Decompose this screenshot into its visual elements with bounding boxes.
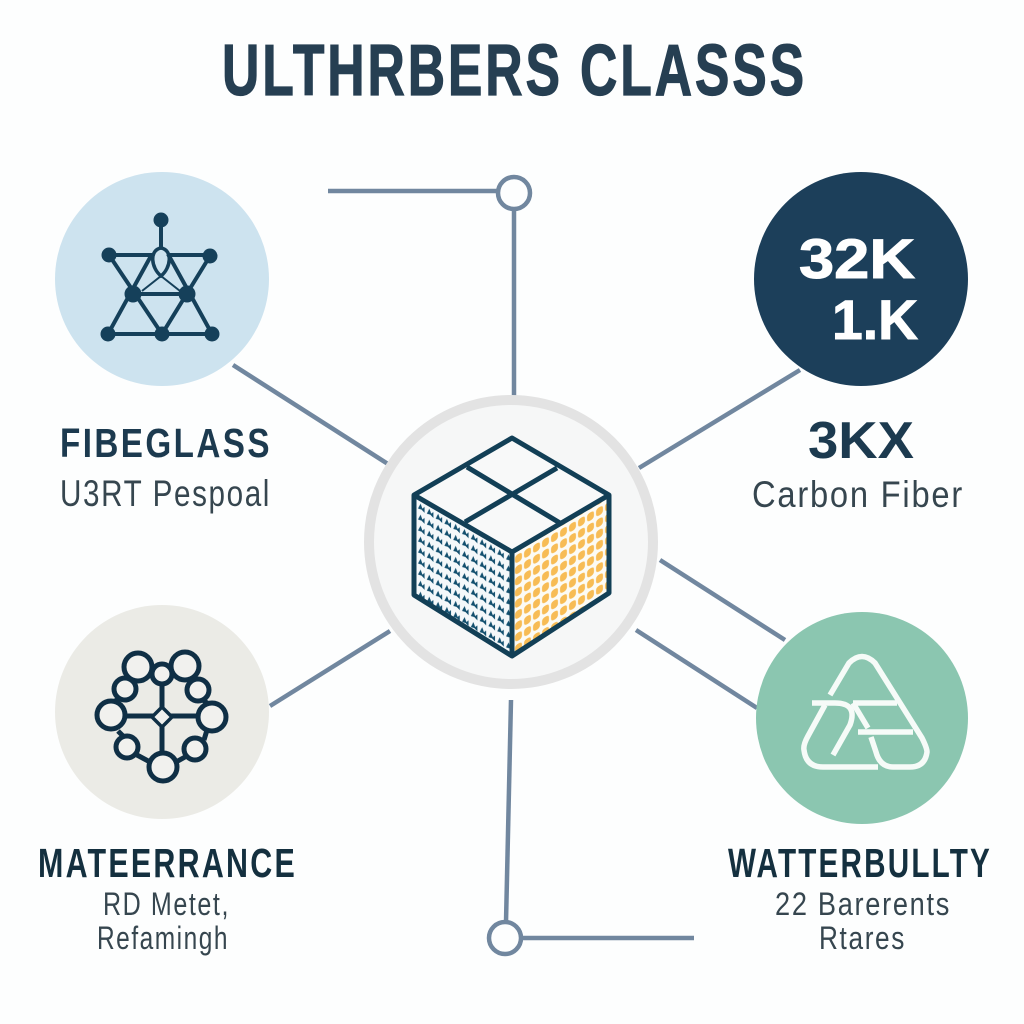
icon: lattice network	[100, 212, 220, 342]
label: carbon fiber: 3KX	[808, 412, 914, 470]
connector lines	[233, 191, 800, 938]
panel: maintenance circle	[55, 605, 269, 819]
sublabel: U3RT Pespoal	[60, 473, 271, 514]
icon: recycling triangle	[804, 656, 927, 767]
stat: 32K: 32K	[799, 227, 915, 290]
label: waterbullty	[728, 840, 992, 956]
sublabel line 2: Refamingh	[97, 920, 229, 956]
sublabel: Carbon Fiber	[752, 474, 964, 515]
label: carbon fiber	[752, 412, 964, 515]
sublabel line 2: Rtares	[819, 920, 906, 956]
label: maintenance	[38, 840, 297, 956]
sublabel line 1: RD Metet,	[103, 886, 230, 922]
bottom connector node	[489, 922, 521, 954]
icon: node ring	[97, 652, 226, 781]
label: fiberglass	[60, 420, 272, 514]
panel: carbon fiber circle	[754, 172, 968, 386]
icon: composite cube	[414, 438, 609, 656]
top connector node	[498, 177, 530, 209]
panel: waterbullty circle	[756, 612, 968, 824]
panel: fiberglass circle	[55, 172, 269, 386]
sublabel line 1: 22 Barerents	[775, 886, 951, 922]
stat: 1.K: 1.K	[832, 288, 918, 351]
label: fiberglass: FIBEGLASS	[60, 420, 272, 466]
label: maintenance: MATEERRANCE	[38, 840, 297, 886]
title: ULTHRBERS CLASSS	[222, 31, 807, 111]
panel: central hub	[369, 400, 653, 684]
